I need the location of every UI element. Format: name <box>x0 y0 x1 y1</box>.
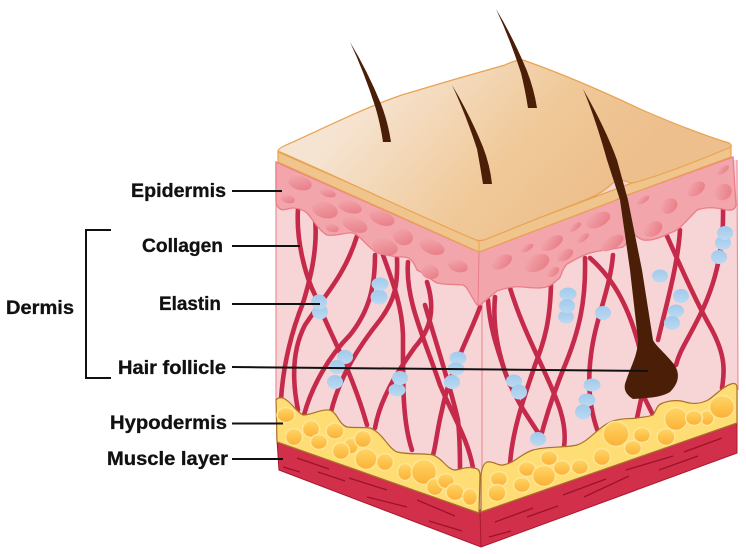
elastin beads <box>311 226 733 446</box>
fat cells <box>277 396 734 506</box>
hairs <box>350 9 678 399</box>
panel: dermis background <box>276 160 738 510</box>
label: Epidermis: Epidermis <box>131 181 226 202</box>
label: Elastin: Elastin <box>159 294 221 315</box>
label: Hair follicle: Hair follicle <box>118 358 226 379</box>
muscle layer <box>277 420 737 547</box>
label: Dermis with bracket <box>6 230 111 378</box>
hypodermis <box>276 384 737 513</box>
collagen fibres <box>281 208 724 470</box>
label: Collagen: Collagen <box>142 236 223 257</box>
epidermis cells <box>280 164 735 281</box>
label: Hair follicle <box>118 358 648 379</box>
label: Hypodermis: Hypodermis <box>110 413 227 434</box>
hair follicle <box>583 89 678 399</box>
dermis edges <box>276 160 738 470</box>
epidermis <box>276 157 736 305</box>
muscle fibre lines <box>283 438 722 537</box>
label: Muscle layer: Muscle layer <box>107 449 229 470</box>
skin surface <box>278 60 731 252</box>
label: Dermis with bracket: Dermis <box>6 298 74 319</box>
